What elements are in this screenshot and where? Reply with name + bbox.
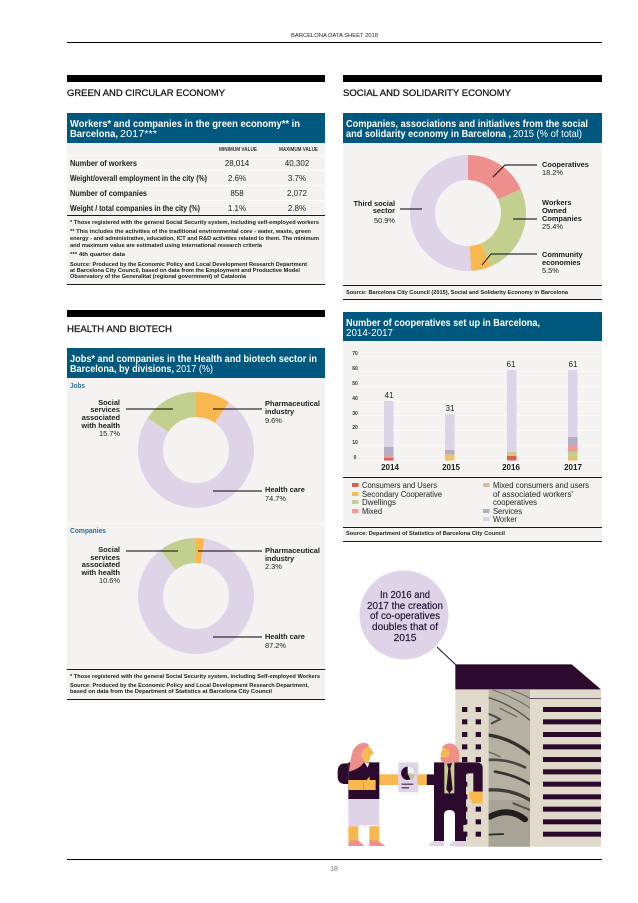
table: minimum and maximum values: MINIMUM VALUE xyxy=(219,147,258,153)
legend: Secondary Cooperative xyxy=(362,490,442,499)
legend xyxy=(352,481,589,524)
table notes: energy - and administrative, education, ICT and R&D activities related to them. The minimum xyxy=(70,236,319,242)
donut labels: social economy: Workers xyxy=(542,198,571,207)
legend: Dwellings xyxy=(362,498,396,507)
health notes xyxy=(70,674,320,695)
donut labels: jobs: Health care xyxy=(265,485,305,494)
panel title: jobs and companies: 2017 (%) xyxy=(176,363,213,375)
bar chart: cooperatives by year: 50 xyxy=(352,381,358,387)
donut labels: social economy: Third social xyxy=(354,199,395,208)
panel title: companies and associations xyxy=(343,113,602,143)
bar chart: cooperatives by year: 10 xyxy=(352,440,358,446)
donut labels: jobs: Social xyxy=(98,398,120,407)
table notes: ** This includes the activities of the traditional environmental core - water, waste, green xyxy=(70,229,312,235)
bar 2016: 2016 xyxy=(502,463,520,472)
donut chart: social economy xyxy=(422,168,514,258)
bar chart: cooperatives by year: 0 xyxy=(354,455,357,461)
panel: number of cooperatives xyxy=(343,312,602,542)
table notes: and maximum value are estimated using international research criteria xyxy=(70,243,263,249)
bar 2017: 2017 xyxy=(564,463,582,472)
document xyxy=(398,762,418,792)
donut labels: companies: associated xyxy=(82,560,120,569)
donut labels: companies: Social xyxy=(98,545,120,554)
donut chart: companies xyxy=(150,550,242,642)
panel title: number of cooperatives xyxy=(343,312,602,341)
health notes: * Those registered with the general Social Security system, including Self-employed Workers xyxy=(70,674,320,680)
donut labels: social economy: 5.5% xyxy=(542,266,559,275)
legend: Consumers and Users xyxy=(362,481,437,490)
panel title: companies and associations: and solidarity economy in Barcelona , xyxy=(346,128,511,140)
donut labels: social economy: Cooperatives xyxy=(542,160,589,169)
panel: health and biotech xyxy=(67,310,325,700)
donut labels: social economy: Community xyxy=(542,250,584,259)
donut labels: jobs: 9.6% xyxy=(265,416,282,425)
subheading: jobs: Jobs xyxy=(70,383,85,390)
bar 2014: 41 xyxy=(385,391,394,400)
donut labels: social economy: 50.9% xyxy=(374,216,395,225)
source: cooperatives: Source: Department of Statistics of Barcelona City Council xyxy=(346,531,505,537)
bar chart: cooperatives by year: 30 xyxy=(352,411,358,417)
man xyxy=(417,743,483,846)
donut labels: social economy: 25.4% xyxy=(542,222,563,231)
bar 2015: 31 xyxy=(446,404,455,413)
table: minimum and maximum values: Number of companies xyxy=(70,189,148,198)
donut labels: companies: services xyxy=(90,553,120,562)
bar chart: cooperatives by year xyxy=(352,351,600,472)
bar chart: cooperatives by year: 40 xyxy=(352,396,358,402)
table: minimum and maximum values: MAXIMUM VALUE xyxy=(279,147,319,153)
bar 2016: 61 xyxy=(507,360,516,369)
table: minimum and maximum values: 1.1% xyxy=(228,204,246,213)
woman xyxy=(338,743,398,846)
health notes: Source: Produced by the Economic Policy and Local Development Research Department, xyxy=(70,683,309,689)
legend: cooperatives xyxy=(493,498,537,507)
table: minimum and maximum values: 28,014 xyxy=(225,159,250,168)
table: minimum and maximum values: 2.6% xyxy=(228,174,246,183)
donut labels: jobs xyxy=(80,398,320,503)
donut labels: jobs: industry xyxy=(265,407,295,416)
callout: creation of co-operatives: doubles that of xyxy=(372,622,438,633)
legend: Mixed xyxy=(362,507,382,516)
subheading: companies: Companies xyxy=(70,528,106,535)
page header: BARCELONA DATA SHEET 2018 xyxy=(291,33,378,39)
callout: creation of co-operatives: 2015 xyxy=(394,633,417,644)
heading: health and biotech: HEALTH AND BIOTECH xyxy=(67,324,172,335)
legend: Services xyxy=(493,507,522,516)
table notes: at Barcelona City Council, based on data from the Employment and Productive Model xyxy=(70,268,300,274)
heading: social and solidarity economy: SOCIAL AND SOLIDARITY ECONOMY xyxy=(343,88,512,99)
panel title: number of cooperatives: Number of cooperatives set up in Barcelona, xyxy=(346,317,540,329)
table: minimum and maximum values: 2.8% xyxy=(288,204,306,213)
panel title: jobs and companies xyxy=(67,348,325,378)
photo: facade xyxy=(487,689,533,847)
bar 2017: 61 xyxy=(569,360,578,369)
panel title: workers and companies: Barcelona, xyxy=(70,128,118,140)
donut labels: jobs: Pharmaceutical xyxy=(265,399,320,408)
donut labels: social economy: sector xyxy=(373,206,395,215)
callout: creation of co-operatives: of co-operatives xyxy=(370,611,440,622)
panel: green and circular economy xyxy=(67,75,325,285)
donut labels: social economy: Companies xyxy=(542,214,582,223)
donut labels: companies: Health care xyxy=(265,632,305,641)
table notes: *** 4th quarter data xyxy=(70,252,126,258)
table notes: Source: Produced by the Economic Policy and Local Development Research Department xyxy=(70,262,307,268)
table: minimum and maximum values xyxy=(67,147,325,213)
donut labels: jobs: 74.7% xyxy=(265,494,286,503)
panel title: jobs and companies: Barcelona, by divisions, xyxy=(70,363,174,375)
donut labels: companies: 10.6% xyxy=(99,576,120,585)
bar chart: cooperatives by year: 20 xyxy=(352,425,358,431)
donut chart: jobs xyxy=(150,404,242,496)
donut labels: companies: industry xyxy=(265,554,295,563)
donut labels: jobs: 15.7% xyxy=(99,429,120,438)
donut labels: jobs: services xyxy=(90,405,120,414)
table: minimum and maximum values: 2,072 xyxy=(287,189,308,198)
bar 2017 xyxy=(564,360,582,472)
donut labels: jobs: associated xyxy=(82,413,120,422)
bar chart: cooperatives by year: 70 xyxy=(352,351,358,357)
panel title: companies and associations: 2015 (% of total) xyxy=(513,128,582,140)
table: minimum and maximum values: 40,302 xyxy=(285,159,310,168)
heading: green and circular economy: GREEN AND CIRCULAR ECONOMY xyxy=(67,88,226,99)
bar chart: cooperatives by year: 60 xyxy=(352,366,358,372)
callout: creation of co-operatives: 2017 the creation xyxy=(367,601,443,612)
table: minimum and maximum values: 3.7% xyxy=(288,174,306,183)
panel: social and solidarity economy xyxy=(343,75,602,300)
table: minimum and maximum values: Weight / total companies in the city (%) xyxy=(70,204,200,213)
bar 2014: 2014 xyxy=(381,463,399,472)
callout: creation of co-operatives xyxy=(360,570,456,665)
panel title: companies and associations: Companies, associations and initiatives from the social xyxy=(346,118,588,130)
table notes: * Those registered with the general Social Security system, including self-employed workers xyxy=(70,220,319,226)
health notes: based on data from the Department of Statistics at Barcelona City Council xyxy=(70,689,272,695)
windows xyxy=(462,707,481,837)
table: minimum and maximum values: Number of workers xyxy=(70,159,138,168)
donut labels: companies xyxy=(80,545,320,650)
table: minimum and maximum values: 858 xyxy=(230,189,244,198)
legend: of associated workers' xyxy=(493,490,574,499)
donut labels: social economy: Owned xyxy=(542,206,567,215)
donut labels: social economy xyxy=(354,160,589,275)
bar 2015: 2015 xyxy=(442,463,460,472)
panel title: workers and companies xyxy=(67,113,325,143)
bar 2015 xyxy=(442,404,460,472)
bar 2016 xyxy=(502,360,520,472)
donut labels: companies: 87.2% xyxy=(265,641,286,650)
illustration: people exchanging document xyxy=(338,743,483,846)
donut labels: social economy: 18.2% xyxy=(542,168,563,177)
table: minimum and maximum values: Weight/overall employment in the city (%) xyxy=(70,174,207,183)
table notes xyxy=(70,220,319,280)
floors stripes xyxy=(543,707,601,837)
illustration: building xyxy=(455,664,601,847)
donut labels: companies: Pharmaceutical xyxy=(265,546,320,555)
donut labels: jobs: with health xyxy=(80,421,120,430)
donut labels: companies: 2.3% xyxy=(265,562,282,571)
legend: Mixed consumers and users xyxy=(493,481,589,490)
donut labels: social economy: economies xyxy=(542,258,581,267)
source: social economy: Source: Barcelona City Council (2015), Social and Solidarity Economy in Barcelona xyxy=(346,290,569,296)
page footer: 18 xyxy=(330,866,338,873)
table notes: Observatory of the Generalitat (regional government) of Catalonia xyxy=(70,274,247,280)
bar 2014 xyxy=(381,391,399,472)
panel title: workers and companies: 2017*** xyxy=(120,128,157,140)
panel title: jobs and companies: Jobs* and companies in the Health and biotech sector in xyxy=(70,353,317,365)
panel title: number of cooperatives: 2014-2017 xyxy=(346,327,393,339)
legend: Worker xyxy=(493,515,517,524)
donut labels: companies: with health xyxy=(80,568,120,577)
panel title: workers and companies: Workers* and companies in the green economy** in xyxy=(70,118,300,130)
callout: creation of co-operatives: In 2016 and xyxy=(380,590,430,601)
